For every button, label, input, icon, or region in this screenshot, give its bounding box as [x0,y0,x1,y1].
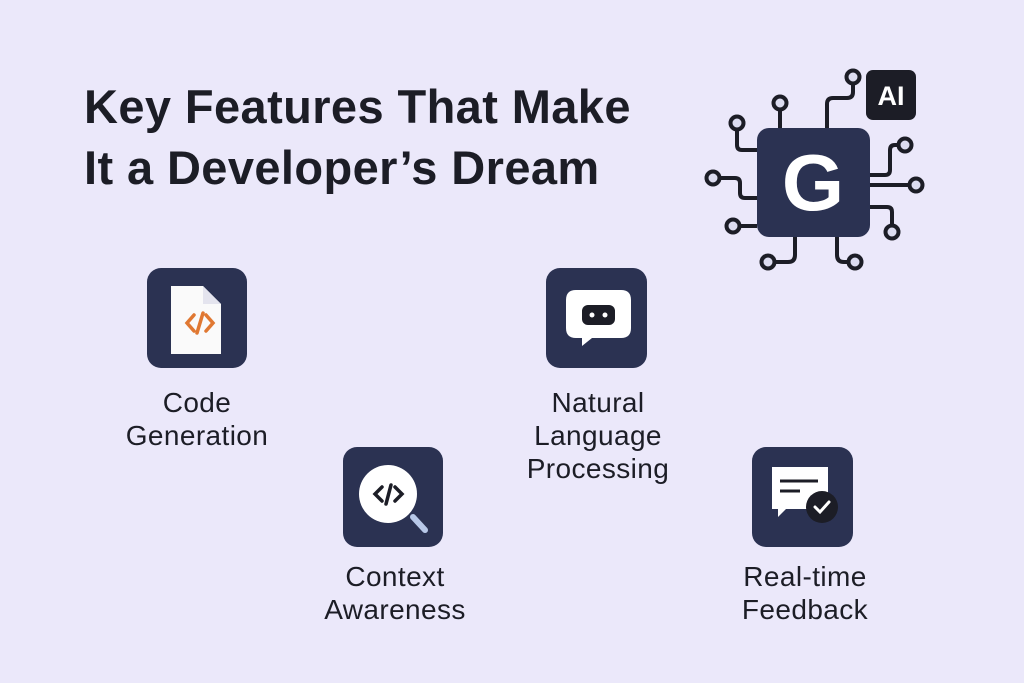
icon: AI chip: G [782,138,844,227]
label: natural language processing: Natural [551,387,645,418]
label: context awareness: Awareness [324,594,466,625]
label: natural language processing [527,387,669,484]
label: real-time feedback: Feedback [742,594,868,625]
icon: natural language processing [546,268,647,368]
label: natural language processing: Language [534,420,662,451]
label: context awareness: Context [345,561,445,592]
title [84,80,631,194]
icon: AI chip: AI [878,81,904,111]
icon: real-time feedback [752,447,853,547]
label: code generation: Code [163,387,231,418]
icon: code generation [147,268,247,368]
label: real-time feedback [742,561,868,625]
label: code generation [126,387,268,451]
label: code generation: Generation [126,420,268,451]
icon: context awareness [343,447,443,547]
label: natural language processing: Processing [527,453,669,484]
label: real-time feedback: Real-time [743,561,867,592]
label: context awareness [324,561,466,625]
title: It a Developer’s Dream [84,141,600,194]
title: Key Features That Make [84,80,631,133]
